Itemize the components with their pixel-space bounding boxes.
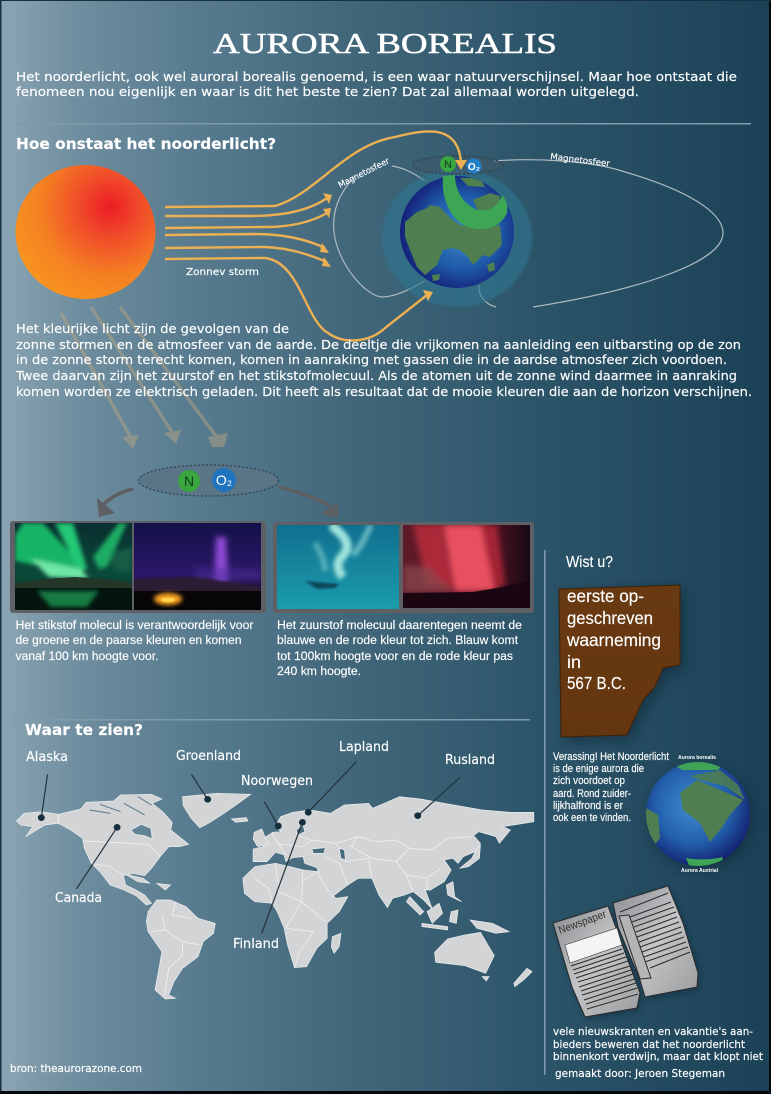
arctic channels xyxy=(90,797,152,815)
map labels: Alaska xyxy=(26,750,68,765)
O2 circle: O₂ xyxy=(468,162,480,173)
molecule diagram: O₂ xyxy=(216,472,232,488)
caption: oxygen: Het zuurstof molecuul daarentegen neemt de xyxy=(277,618,522,632)
O2 circle xyxy=(466,158,482,174)
right page xyxy=(613,886,698,997)
explanation text xyxy=(15,321,752,399)
photo: red aurora xyxy=(403,525,530,608)
globe: africa view xyxy=(646,762,753,870)
title: AURORA BOREALIS xyxy=(213,28,557,60)
world map xyxy=(17,762,534,999)
text: newspapers claim: vele nieuwskranten en vakantie's aan- xyxy=(553,1026,753,1038)
map labels: Canada xyxy=(55,891,102,906)
label: aurora borealis: Aurora borealis xyxy=(678,755,716,761)
map labels: Groenland xyxy=(176,749,241,764)
location lines and dots xyxy=(41,762,460,933)
explanation text: Twee daarvan zijn het zuurstof en het stikstofmolecuul. Als de atomen uit de zonne wind daarmee in aanraking xyxy=(15,368,737,383)
photo: purple aurora xyxy=(134,523,261,610)
credit: gemaakt door: Jeroen Stegeman xyxy=(555,1068,725,1080)
text: aurora australis: Verassing! Het Noorderlicht xyxy=(553,751,669,763)
intro text xyxy=(16,69,737,99)
text: aurora australis: aard. Rond zuider- xyxy=(553,788,631,800)
caption: nitrogen: Het stikstof molecul is verantwoordelijk voor xyxy=(16,618,254,632)
N circle xyxy=(440,156,456,172)
heading: waar te zien: Waar te zien? xyxy=(25,721,143,739)
caption: oxygen: 240 km hoogte. xyxy=(277,664,361,678)
callout: first record: waarneming xyxy=(566,630,661,650)
faded arrows from sun to molecules xyxy=(61,307,228,449)
continents xyxy=(405,178,502,281)
text: newspapers claim: bieders beweren dat het noorderlicht xyxy=(553,1039,745,1051)
left page xyxy=(553,906,640,1017)
heading: hoe onstaat: Hoe onstaat het noorderlicht? xyxy=(16,135,276,153)
green aurora crescent xyxy=(443,175,507,229)
globe xyxy=(400,176,514,288)
callout: first record xyxy=(559,585,684,742)
solar wind arrows xyxy=(165,131,461,340)
panel: nitrogen photos xyxy=(10,521,266,613)
label: magnetosfeer right: Magnetosfeer xyxy=(550,152,611,169)
land masses xyxy=(17,793,534,999)
callout: first record: geschreven xyxy=(567,608,653,628)
text: aurora australis: is de enige aurora die xyxy=(553,763,644,775)
caption: oxygen: tot 100km hoogte voor en de rode kleur pas xyxy=(277,649,513,663)
label: zonnev storm: Zonnev storm xyxy=(186,267,259,278)
text: aurora australis: lijkhalfrond is er xyxy=(553,800,623,812)
sun xyxy=(16,165,156,299)
panel: oxygen photos xyxy=(273,522,534,613)
map labels: Finland xyxy=(233,937,279,952)
arrow heads xyxy=(320,160,467,301)
map labels: Noorwegen xyxy=(241,774,313,789)
caption: oxygen: blauwe en de rode kleur tot zich. Blauw komt xyxy=(277,633,519,647)
caption: nitrogen xyxy=(16,618,254,663)
map labels xyxy=(26,740,495,952)
source: bron: theaurorazone.com xyxy=(10,1063,142,1075)
text: newspapers claim: binnenkort verdwijn, maar dat klopt niet xyxy=(553,1051,763,1063)
explanation text: Het kleurijke licht zijn de gevolgen van de xyxy=(16,321,289,336)
text: aurora australis: ook een te vinden. xyxy=(553,812,631,824)
dotted molecule zone xyxy=(413,156,503,174)
wist u heading: Wist u? xyxy=(566,554,613,571)
magnetosphere lines xyxy=(334,160,723,307)
headline box xyxy=(565,928,622,963)
callout: first record: in xyxy=(567,652,581,672)
article lines xyxy=(571,893,690,1009)
atmosphere halo xyxy=(382,169,532,307)
map labels: Rusland xyxy=(445,753,495,768)
photo: blue aurora xyxy=(277,525,399,609)
label: aurora austrial: Aurora Austrial xyxy=(681,868,719,874)
country borders xyxy=(59,814,472,995)
newspaper title: Newspaper xyxy=(557,908,608,937)
text: aurora australis xyxy=(553,751,669,824)
icon: newspaper xyxy=(553,886,700,1020)
earth with atmosphere xyxy=(382,156,532,307)
caption: nitrogen: vanaf 100 km hoogte voor. xyxy=(16,649,158,663)
arrow: to nitrogen photos xyxy=(97,489,133,517)
label: magnetosfeer left: Magnetosfeer xyxy=(337,156,392,191)
molecule diagram xyxy=(138,465,278,496)
explanation text: zonne stormen en de atmosfeer van de aarde. De deeltje die vrijkomen na aanleiding een uitbarsting op de zon xyxy=(16,337,741,352)
callout: first record: 567 B.C. xyxy=(567,673,626,693)
callout: first record: eerste op- xyxy=(567,586,644,606)
map labels: Lapland xyxy=(339,740,389,755)
intro text: Het noorderlicht, ook wel auroral borealis genoemd, is een waar natuurverschijnsel. Maar hoe ontstaat die xyxy=(16,69,737,84)
N circle: N xyxy=(444,159,452,171)
caption: nitrogen: de groene en de paarse kleuren en komen xyxy=(16,633,242,647)
text: aurora australis: zich voordoet op xyxy=(553,775,625,787)
text: newspapers claim xyxy=(553,1026,763,1063)
arrow: to oxygen photos xyxy=(278,487,338,518)
explanation text: komen worden ze elektrisch geladen. Dit heeft als resultaat dat de mooie kleuren die aan de horizon verschijnen. xyxy=(16,384,752,399)
explanation text: in de zonne storm terecht komen, komen in aanraking met gassen die in de aardse atmosfeer zich voordoen. xyxy=(16,352,727,367)
caption: oxygen xyxy=(277,618,522,678)
intro text: fenomeen nou eigenlijk en waar is dit het beste te zien? Dat zal allemaal worden uitgelegd. xyxy=(16,84,639,99)
molecule diagram: N xyxy=(184,473,194,489)
photo: green aurora xyxy=(15,523,132,610)
